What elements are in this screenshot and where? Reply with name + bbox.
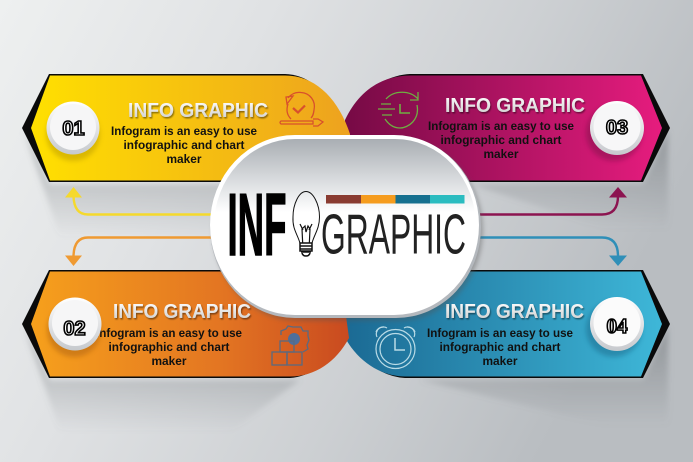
- logo colour bars: [326, 195, 464, 204]
- panel 04: blue: [338, 270, 670, 378]
- body text: [427, 326, 573, 368]
- number badge 02: [47, 298, 102, 357]
- logo word GRAPHIC: GRAPHIC: [321, 202, 466, 266]
- body text: Infogram is an easy to use: [427, 326, 573, 340]
- heading: INFO GRAPHIC: [113, 301, 251, 323]
- heading: INFO GRAPHIC: [445, 301, 584, 323]
- heading: INFO GRAPHIC: [445, 95, 585, 117]
- body text: [96, 326, 242, 368]
- icon: alarm clock: [376, 327, 415, 368]
- arrow: to panel 02: [65, 238, 212, 266]
- number badge 01: [46, 102, 100, 161]
- icon: clock with motion lines: [378, 92, 418, 128]
- body text: infographic and chart: [440, 340, 560, 354]
- icon: cycle check: [280, 92, 323, 126]
- body text: maker: [152, 354, 187, 368]
- number badge 04: 04: [606, 314, 628, 338]
- panel 03: magenta: [345, 74, 670, 182]
- body text: infographic and chart: [108, 340, 230, 354]
- central badge: [210, 135, 483, 321]
- body text: Infogram is an easy to use: [428, 119, 574, 133]
- body text: Infogram is an easy to use: [111, 124, 257, 138]
- number badge 03: 03: [606, 117, 628, 139]
- icon: light bulb: [293, 192, 320, 256]
- panel 02: orange: [22, 270, 349, 378]
- heading: INFO GRAPHIC: [128, 100, 268, 122]
- icon: gear and boxes: [272, 326, 309, 365]
- number badge 01: 01: [62, 118, 85, 140]
- number badge 04: [586, 297, 644, 357]
- body text: Infogram is an easy to use: [96, 326, 242, 340]
- body text: [111, 124, 257, 166]
- body text: infographic and chart: [440, 133, 562, 147]
- body text: [428, 119, 574, 161]
- body text: maker: [484, 147, 519, 161]
- central badge: INF: [228, 175, 286, 274]
- arrow: to panel 03: [480, 187, 627, 214]
- panel 01: yellow: [22, 74, 350, 182]
- arrow: to panel 04: [480, 238, 627, 266]
- body text: maker: [166, 152, 202, 166]
- arrow: to panel 01: [65, 187, 212, 214]
- body text: infographic and chart: [124, 138, 244, 152]
- panel shadows: [24, 130, 668, 432]
- number badge 03: [586, 101, 644, 161]
- body text: maker: [482, 354, 518, 368]
- number badge 02: 02: [63, 318, 86, 340]
